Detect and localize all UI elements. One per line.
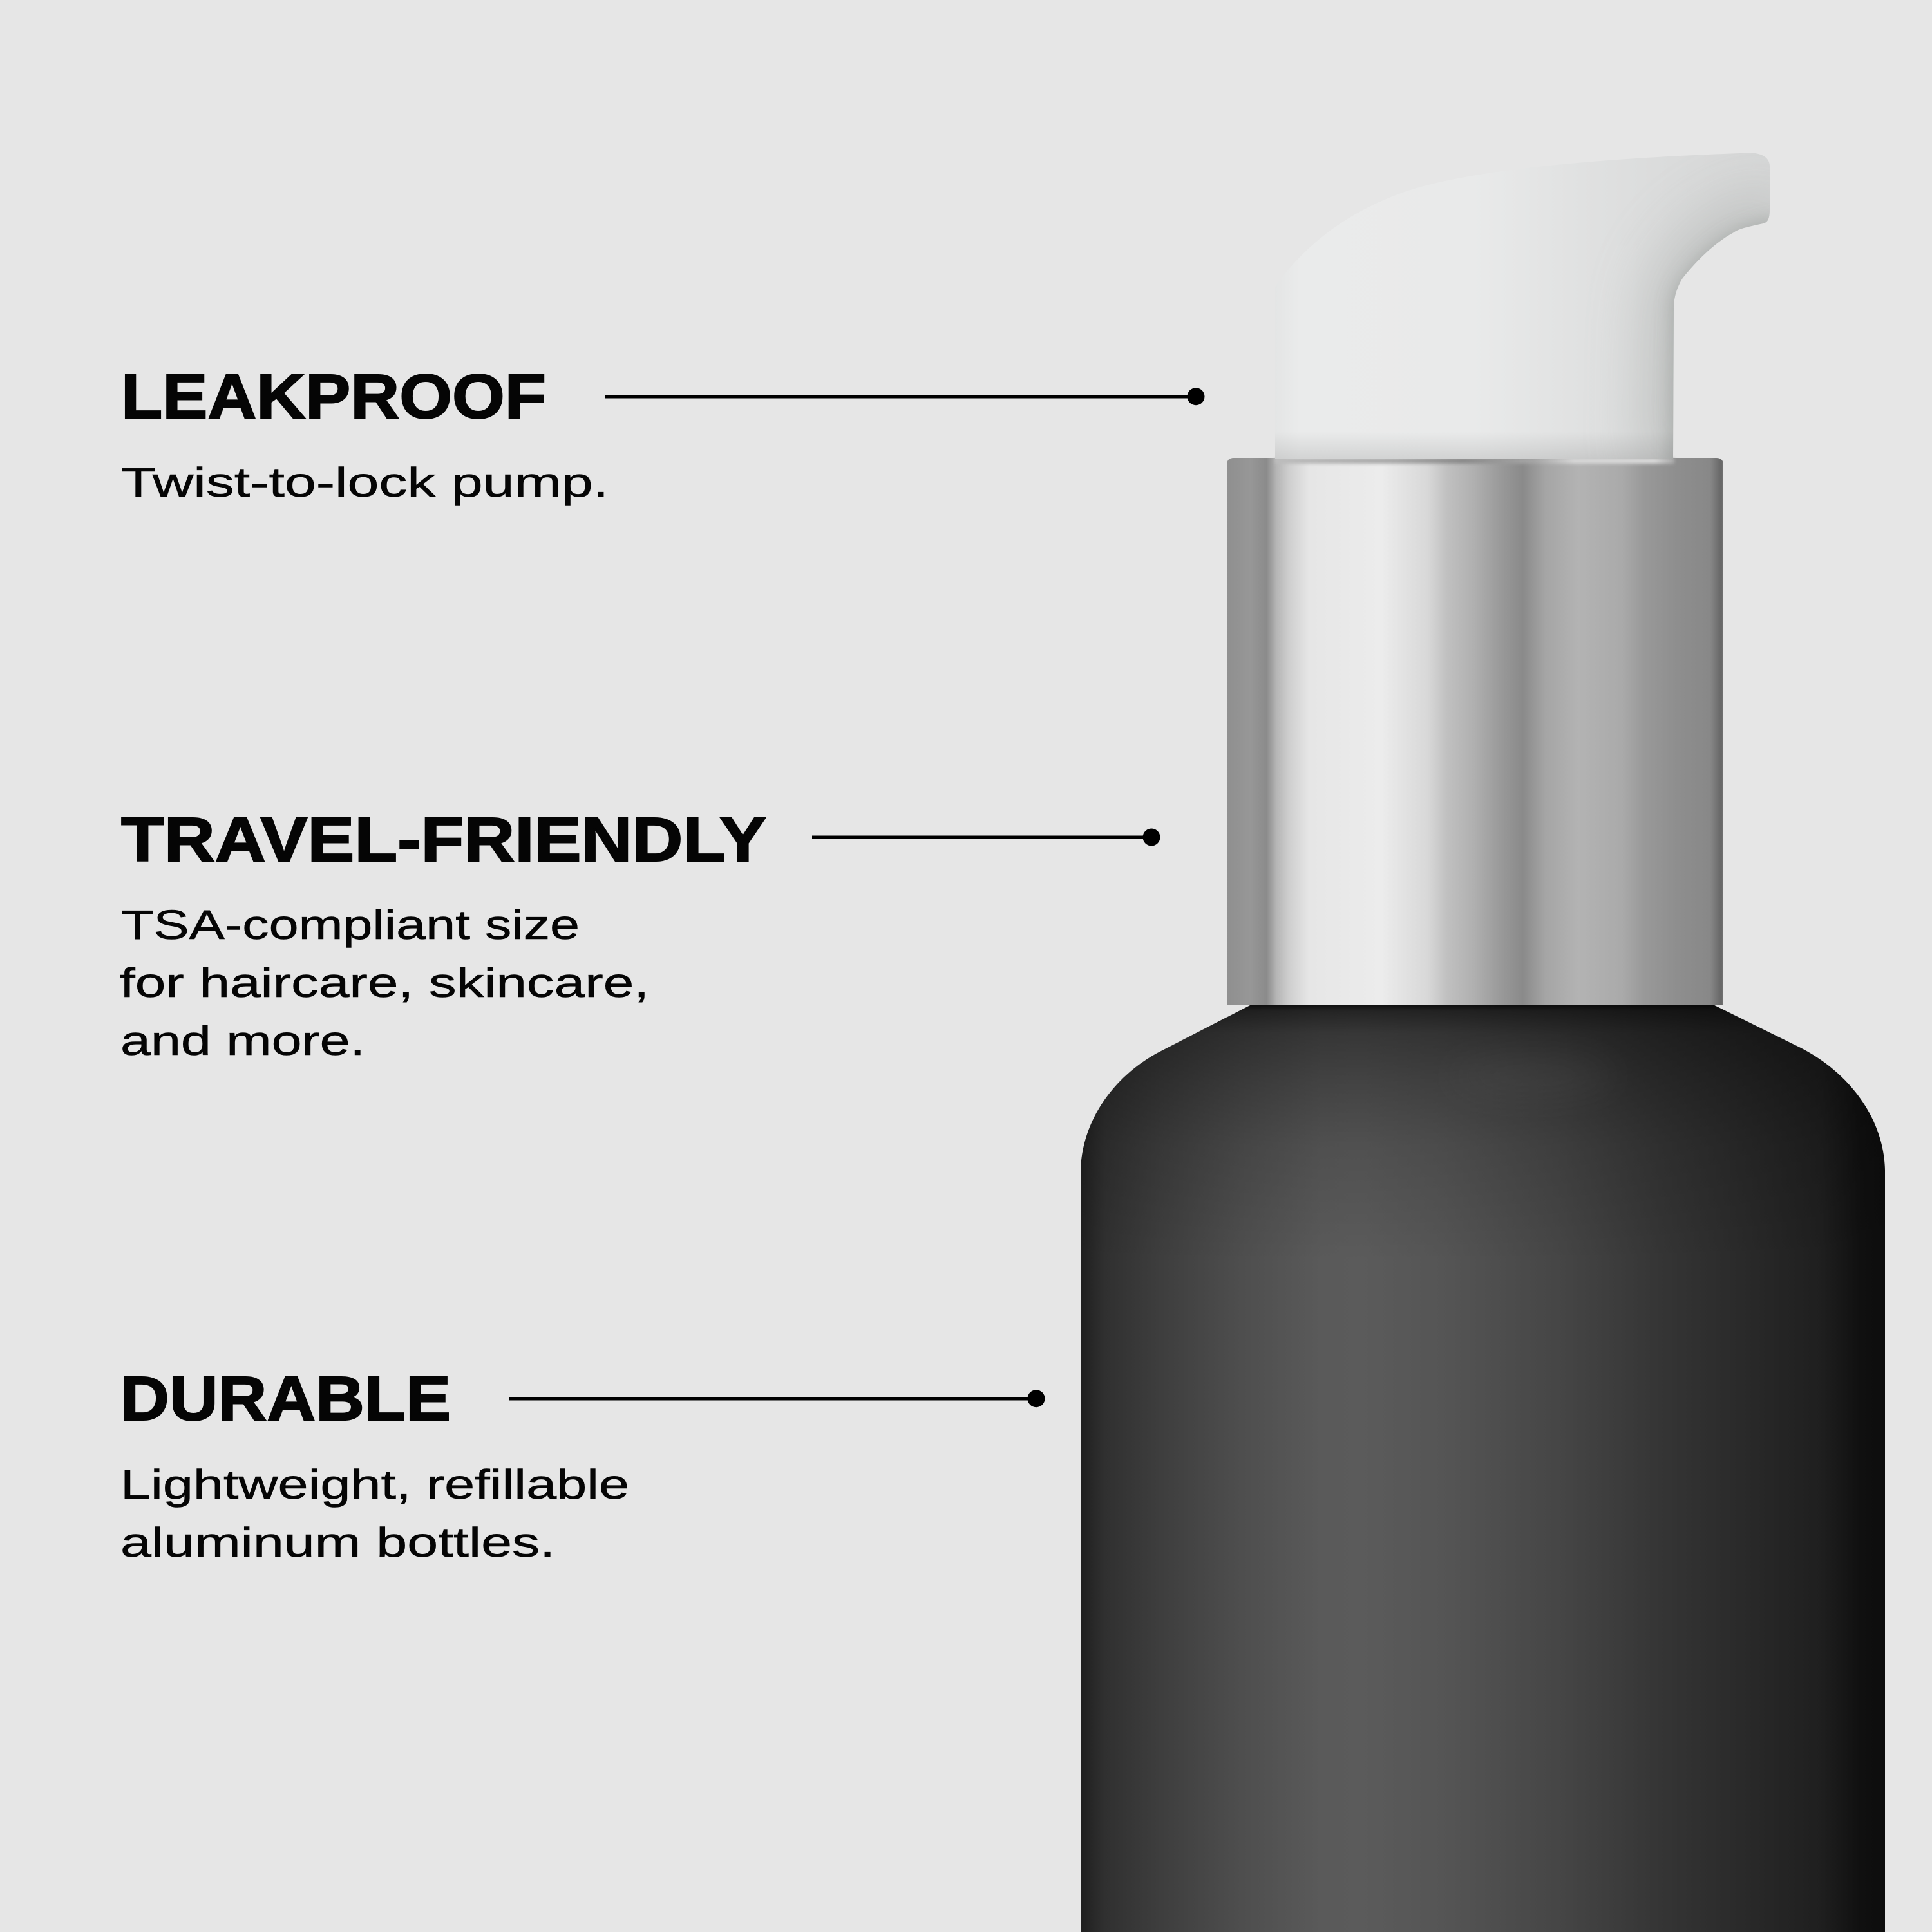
- description: leakproof: Twist-to-lock pump.: [121, 459, 609, 506]
- description: travel-friendly: [120, 902, 649, 1064]
- description: durable: [120, 1461, 629, 1566]
- leader line: travel-friendly: [812, 828, 1160, 846]
- callout: durable: [120, 1363, 1045, 1566]
- leader line: leakproof: [605, 388, 1204, 405]
- callout: travel-friendly: [120, 804, 1160, 1064]
- description: travel-friendly: for haircare, skincare,: [120, 960, 649, 1006]
- description: travel-friendly: and more.: [120, 1018, 365, 1064]
- metal collar: [1227, 458, 1723, 1005]
- description: travel-friendly: TSA-compliant size: [121, 902, 580, 948]
- leader line: durable: [509, 1390, 1045, 1407]
- heading: travel-friendly: TRAVEL-FRIENDLY: [121, 804, 766, 875]
- bottle illustration: [1081, 148, 1885, 1932]
- callout: leakproof: [121, 361, 1204, 506]
- white pump head: [1269, 148, 1784, 470]
- heading: durable: DURABLE: [120, 1363, 451, 1434]
- heading: leakproof: LEAKPROOF: [121, 361, 546, 431]
- description: durable: aluminum bottles.: [120, 1519, 555, 1566]
- description: durable: Lightweight, refillable: [120, 1461, 629, 1508]
- bottle body: [1081, 1003, 1885, 1932]
